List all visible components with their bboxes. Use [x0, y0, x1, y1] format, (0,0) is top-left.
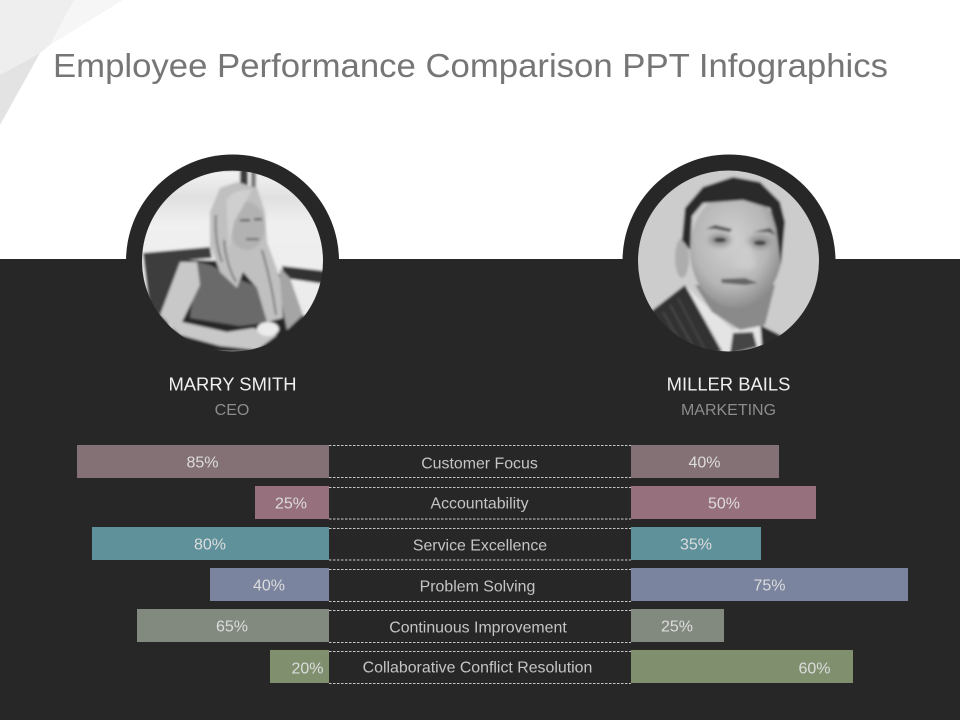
row: Customer Focus [77, 445, 779, 478]
row: Problem Solving [210, 568, 908, 602]
row: Service Excellence: 80% [194, 536, 226, 554]
dark lower panel [0, 259, 960, 720]
row: Accountability: 50% [708, 496, 740, 512]
portrait: Miller Bails [622, 154, 836, 368]
row: Accountability: Accountability [430, 496, 529, 512]
ring: right portrait [622, 154, 836, 368]
portrait: Marry Smith [126, 154, 339, 368]
row: Problem Solving: 75% [753, 578, 786, 594]
row: Problem Solving: 40% [253, 578, 285, 594]
name block: Miller Bails: MILLER BAILS [667, 374, 790, 394]
photo: woman at window [140, 168, 326, 354]
row: Service Excellence: Service Excellence [413, 538, 547, 554]
row: Accountability: 25% [275, 496, 307, 512]
row: Continuous Improvement: 25% [661, 618, 693, 636]
row: Continuous Improvement: Continuous Improvement [389, 620, 567, 636]
row: Continuous Improvement [137, 609, 724, 642]
photo: man in suit [636, 168, 822, 356]
row: Collaborative Conflict Resolution: 60% [798, 660, 831, 678]
name block: Marry Smith: MARRY SMITH [168, 374, 297, 394]
name block: Marry Smith [168, 374, 297, 419]
row: Service Excellence: 35% [680, 536, 712, 554]
row: Collaborative Conflict Resolution: 20% [291, 660, 324, 678]
row: Continuous Improvement: 65% [216, 618, 248, 636]
row: Customer Focus: 40% [688, 454, 721, 472]
decorative corner background shapes [0, 0, 123, 125]
title: Employee Performance Comparison PPT Infographics [53, 47, 888, 84]
row: Collaborative Conflict Resolution: Collaborative Conflict Resolution [363, 660, 592, 676]
name block: Miller Bails: MARKETING [681, 402, 776, 419]
row: Customer Focus: Customer Focus [421, 456, 538, 472]
row: Customer Focus: 85% [186, 454, 219, 472]
row: Problem Solving: Problem Solving [420, 578, 535, 596]
name block: Marry Smith: CEO [215, 402, 249, 419]
row: Accountability [255, 486, 816, 519]
ring: left portrait [126, 154, 339, 368]
row: Service Excellence [92, 527, 761, 560]
name block: Miller Bails [667, 374, 790, 419]
row: Collaborative Conflict Resolution [270, 650, 853, 684]
